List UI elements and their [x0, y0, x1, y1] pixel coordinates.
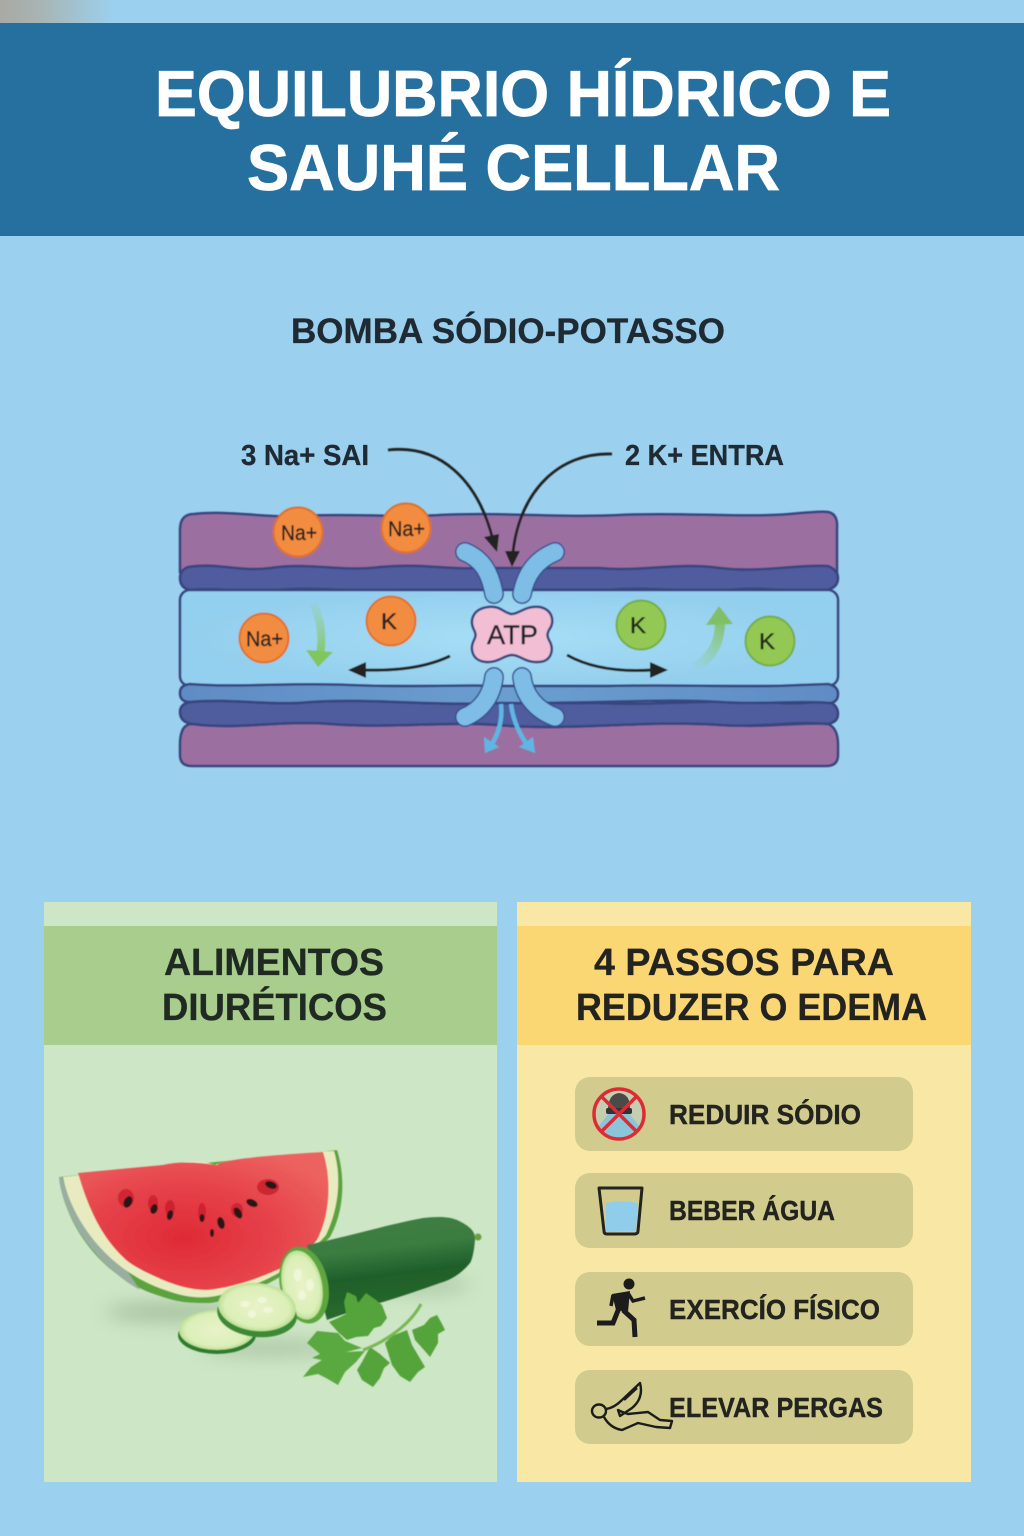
icon: no salt: [594, 1089, 644, 1139]
arrow: 2 K+ in: [505, 454, 612, 567]
food illustration: [59, 1150, 482, 1387]
step 3: exercise: EXERCÍO FÍSICO: [669, 1294, 880, 1325]
step 1: reduce sodium: [575, 1077, 913, 1151]
ion: Na+ 3: [240, 614, 288, 662]
watermelon seeds: [118, 1179, 279, 1221]
membrane lower blue layer: [180, 684, 838, 704]
membrane top dark layer: [180, 566, 838, 591]
ATP molecule: [472, 607, 552, 662]
title banner: [0, 23, 1024, 236]
panel header: 4 steps: 4 PASSOS PARA: [594, 942, 894, 984]
step 2: drink water: [575, 1173, 913, 1248]
ion: K green 1: K: [630, 613, 646, 638]
arrow: 3 Na+ out: [388, 449, 499, 552]
membrane lower dark layer: [180, 701, 838, 727]
ion: K green 2: K: [759, 629, 775, 654]
ion: Na+ 1: [274, 508, 322, 556]
arrow: green up: [694, 606, 733, 668]
step 1: reduce sodium: REDUIR SÓDIO: [669, 1099, 861, 1130]
label: 2 K+ ENTRA: 2 K+ ENTRA: [625, 440, 784, 472]
panel: 4 steps: [517, 902, 971, 1482]
step 3: exercise: [575, 1272, 913, 1346]
ion: Na+ 2: [382, 504, 430, 552]
label: 3 Na+ SAI: 3 Na+ SAI: [241, 440, 369, 472]
ion: Na+ 2: Na+: [388, 518, 425, 541]
ion: Na+ 1: Na+: [281, 522, 317, 545]
cucumber: [178, 1217, 482, 1354]
watermelon: [59, 1150, 342, 1303]
step 4: raise legs: [575, 1370, 913, 1444]
parsley: [303, 1292, 445, 1387]
ion: K green 2: [746, 616, 794, 666]
panel header: 4 steps: [517, 926, 971, 1045]
heading: pump: BOMBA SÓDIO-POTASSO: [291, 311, 725, 351]
icon: person with raised legs: [592, 1383, 672, 1430]
icon: runner: [597, 1278, 645, 1337]
arrow: cell left: [348, 656, 450, 678]
panel header: 4 steps: REDUZER O EDEMA: [576, 987, 927, 1029]
icon: glass of water: [599, 1188, 642, 1234]
panel header: diuretic foods: DIURÉTICOS: [162, 985, 387, 1029]
channel protein: [465, 552, 555, 717]
ion: K orange: K: [381, 609, 397, 634]
title: EQUILUBRIO HÍDRICO E: [155, 57, 891, 130]
ion: Na+ 3: Na+: [246, 628, 283, 651]
ion: K orange: [366, 596, 416, 646]
arrow: cell right: [567, 655, 668, 678]
arrow: green down: [306, 603, 333, 667]
step 2: drink water: BEBER ÁGUA: [669, 1195, 835, 1226]
cell interior: [180, 590, 838, 686]
membrane top purple layer: [180, 512, 837, 572]
panel header: diuretic foods: ALIMENTOS: [164, 942, 384, 984]
title: [155, 57, 891, 204]
membrane lower purple layer: [180, 723, 838, 766]
step 4: raise legs: ELEVAR PERGAS: [669, 1392, 883, 1423]
panel: diuretic foods: [44, 902, 497, 1482]
ATP molecule: ATP: [487, 620, 538, 650]
ion: K green 1: [616, 600, 666, 650]
arrow: blue outflow: [484, 704, 535, 753]
title: SAUHÉ CELLLAR: [247, 131, 780, 204]
diagram: sodium-potassium pump: [180, 449, 838, 766]
panel header: diuretic foods: [44, 926, 497, 1045]
